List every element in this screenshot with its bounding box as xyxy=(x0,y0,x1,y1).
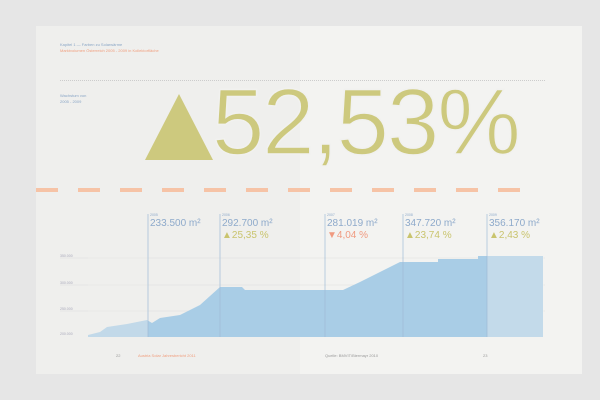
text: ▲23,74 % xyxy=(405,230,452,241)
dashes row xyxy=(36,188,520,192)
subheading: Wachstum von xyxy=(60,93,86,98)
area chart: 350.000 xyxy=(60,254,73,258)
subheading: 2005 - 2009 xyxy=(60,99,81,104)
text: 356.170 m² xyxy=(489,218,540,229)
text: 347.720 m² xyxy=(405,218,456,229)
text: 2008 xyxy=(405,213,413,217)
text: 23 xyxy=(483,353,487,358)
text: 292.700 m² xyxy=(222,218,273,229)
text: ▼4,04 % xyxy=(327,230,368,241)
area chart: 300.000 xyxy=(60,281,73,285)
text: 2006 xyxy=(222,213,230,217)
left page xyxy=(36,26,302,374)
text: ▲2,43 % xyxy=(489,230,530,241)
text: 281.019 m² xyxy=(327,218,378,229)
callouts: 233.500 m² xyxy=(150,218,201,229)
text: 2007 xyxy=(327,213,335,217)
header text: Marktvolumen Österreich 2005 - 2009 in Kollektorfläche xyxy=(60,48,159,53)
icon: big triangle xyxy=(145,94,213,160)
text: Quelle: BMVIT/Biermayr 2010 xyxy=(325,353,378,358)
callouts: 2005 xyxy=(150,213,158,217)
footer: 22 xyxy=(116,353,120,358)
subheading xyxy=(60,93,86,104)
big number: 52,53% xyxy=(212,69,519,174)
text: Austria Solar Jahresbericht 2011 xyxy=(138,353,196,358)
callouts xyxy=(150,213,201,229)
text: ▲25,35 % xyxy=(222,230,269,241)
header text: Kapitel 1 — Farben zu Solarwärme xyxy=(60,42,122,47)
area chart: 200.000 xyxy=(60,332,73,336)
right page xyxy=(300,26,582,374)
text: 2009 xyxy=(489,213,497,217)
area chart: 250.000 xyxy=(60,307,73,311)
header text xyxy=(60,42,159,53)
